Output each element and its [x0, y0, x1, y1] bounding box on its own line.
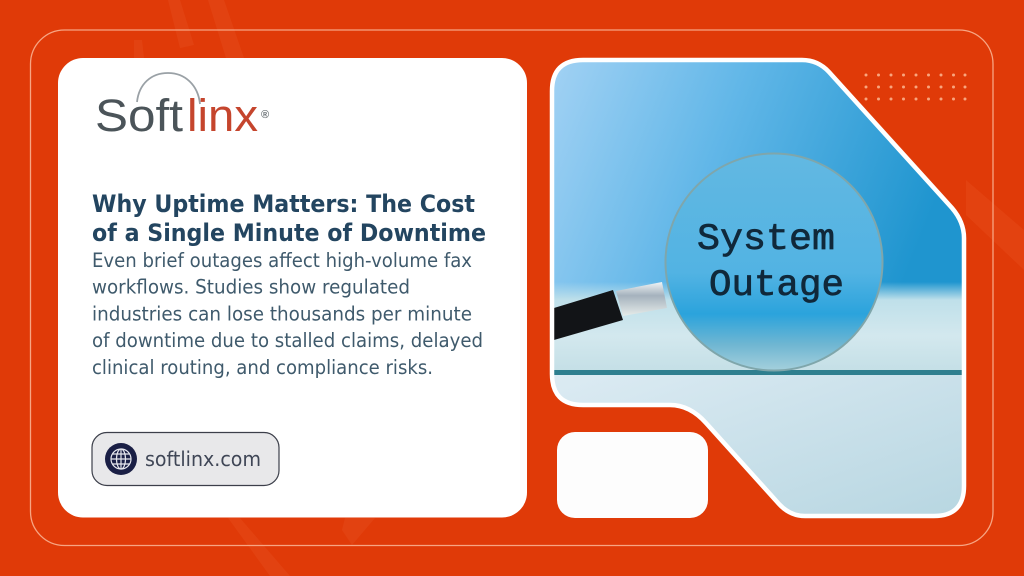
photo white border: [552, 60, 964, 516]
body text: workflows. Studies show regulated: [92, 276, 410, 298]
magnifier lens: System: [697, 219, 835, 261]
body text: [92, 249, 483, 379]
magnifier lens: Outage: [709, 265, 844, 307]
logo: Softlinx: linx: [187, 90, 259, 141]
white rounded box: [557, 432, 708, 518]
logo: Softlinx: [95, 73, 269, 141]
magnifier handle: [554, 282, 667, 340]
heading: Why Uptime Matters: The Cost: [92, 190, 475, 218]
website pill button: [92, 432, 279, 486]
heading: [92, 190, 486, 247]
icon: globe: [105, 443, 137, 475]
website label: softlinx.com: [145, 447, 261, 471]
dot grid: [864, 74, 966, 100]
panel: white content card: [58, 58, 527, 518]
body text: of downtime due to stalled claims, delayed: [92, 329, 483, 352]
logo: Softlinx: Soft: [95, 90, 184, 141]
body text: industries can lose thousands per minute: [92, 302, 472, 326]
photo backdrop: [550, 58, 966, 520]
panel: magnifying glass photo: [550, 58, 966, 520]
body text: Even brief outages affect high-volume fax: [92, 249, 472, 272]
logo: Softlinx: ®: [261, 109, 269, 121]
magnifier lens: [666, 154, 882, 370]
heading: of a Single Minute of Downtime: [92, 219, 486, 247]
body text: clinical routing, and compliance risks.: [92, 356, 433, 379]
